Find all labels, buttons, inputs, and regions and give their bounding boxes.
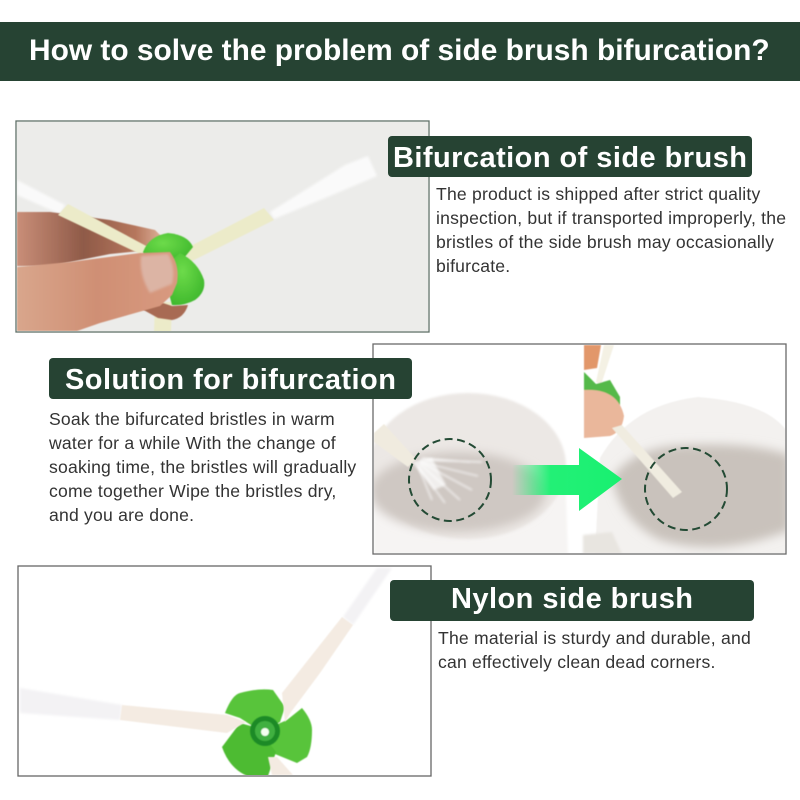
heading: solution for bifurcation: Solution for bifurcation (65, 364, 396, 396)
text block: solution description: Soak the bifurcated bristles in warm (49, 409, 335, 429)
icon: dashed circle before (409, 439, 491, 521)
icon: brush arms (58, 204, 274, 332)
text block: bifurcation description: bifurcate. (436, 256, 510, 276)
icon: left mug (370, 393, 568, 554)
text block: bifurcation description: inspection, but if transported improperly, the (436, 208, 786, 228)
hand: finger below (140, 302, 188, 320)
icon: frayed bristles (17, 156, 377, 219)
hand: thumb (17, 252, 178, 331)
icon: right mug (582, 397, 785, 553)
icon: hub center (250, 716, 280, 746)
text block: solution description: and you are done. (49, 505, 194, 525)
text block: solution description: soaking time, the bristles will gradually (49, 457, 356, 477)
title banner: How to solve the problem of side brush bifurcation? (29, 34, 770, 67)
panel: bifurcated brush photo (16, 121, 429, 332)
heading: bifurcation of side brush: Bifurcation of side brush (393, 142, 747, 174)
hand: thumbnail (141, 254, 173, 293)
panel frame: first photo (16, 121, 429, 332)
panel: soaking photo (370, 344, 790, 554)
icon: hand holding brush (584, 345, 682, 498)
text block: solution description: water for a while With the change of (48, 433, 336, 453)
heading: nylon side brush: Nylon side brush (451, 583, 693, 615)
text block: bifurcation description: The product is shipped after strict quality (436, 184, 760, 204)
title banner (0, 22, 800, 81)
hand: fingers behind brush (17, 212, 165, 266)
icon: green hub (143, 233, 204, 305)
heading: nylon side brush (390, 580, 754, 621)
text block: bifurcation description: bristles of the side brush may occasionally (436, 232, 774, 252)
text block: nylon description: The material is sturdy and durable, and (438, 628, 751, 648)
icon: dashed circle after (645, 448, 727, 530)
panel frame: nylon photo (18, 566, 431, 776)
arrow: green transition arrow (512, 448, 622, 511)
panel: nylon brush photo (20, 568, 390, 775)
icon: green hub (222, 689, 312, 777)
icon: brush arms (120, 617, 353, 775)
text block: solution description: come together Wipe the bristles dry, (49, 481, 337, 501)
text block: nylon description: can effectively clean dead corners. (438, 652, 716, 672)
panel frame: soaking photo (373, 344, 786, 554)
icon: nylon bristles (20, 568, 392, 720)
icon: frayed bristles in water (418, 458, 482, 503)
